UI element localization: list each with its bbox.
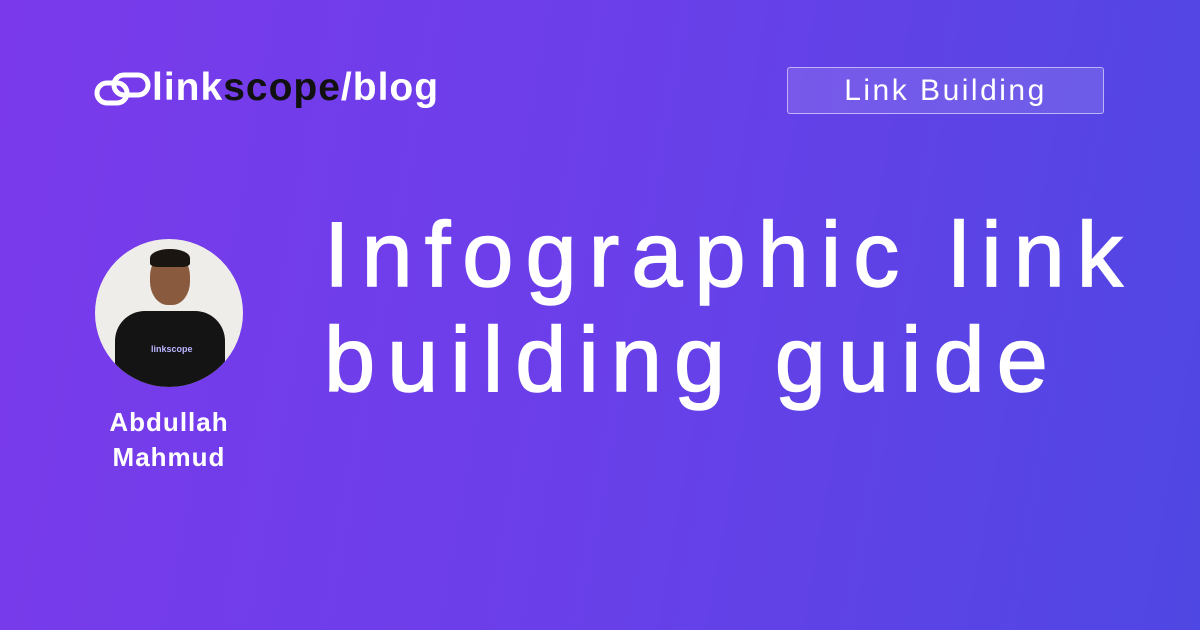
logo text: linkscope/blog: [152, 66, 439, 109]
shirt: [115, 311, 225, 401]
title: [324, 204, 1135, 411]
hair: [150, 249, 190, 267]
category badge: [787, 67, 1104, 114]
title: Infographic link: [324, 204, 1135, 306]
author name: Abdullah: [109, 407, 229, 437]
icon: chain link: [94, 72, 150, 106]
category badge: Link Building: [844, 74, 1047, 107]
shirt logo: linkscope: [151, 344, 193, 354]
title: building guide: [324, 309, 1060, 411]
logo: [94, 66, 439, 109]
author name: [109, 407, 229, 472]
author avatar: [95, 239, 243, 387]
author name: Mahmud: [113, 442, 225, 472]
head: [150, 253, 190, 305]
